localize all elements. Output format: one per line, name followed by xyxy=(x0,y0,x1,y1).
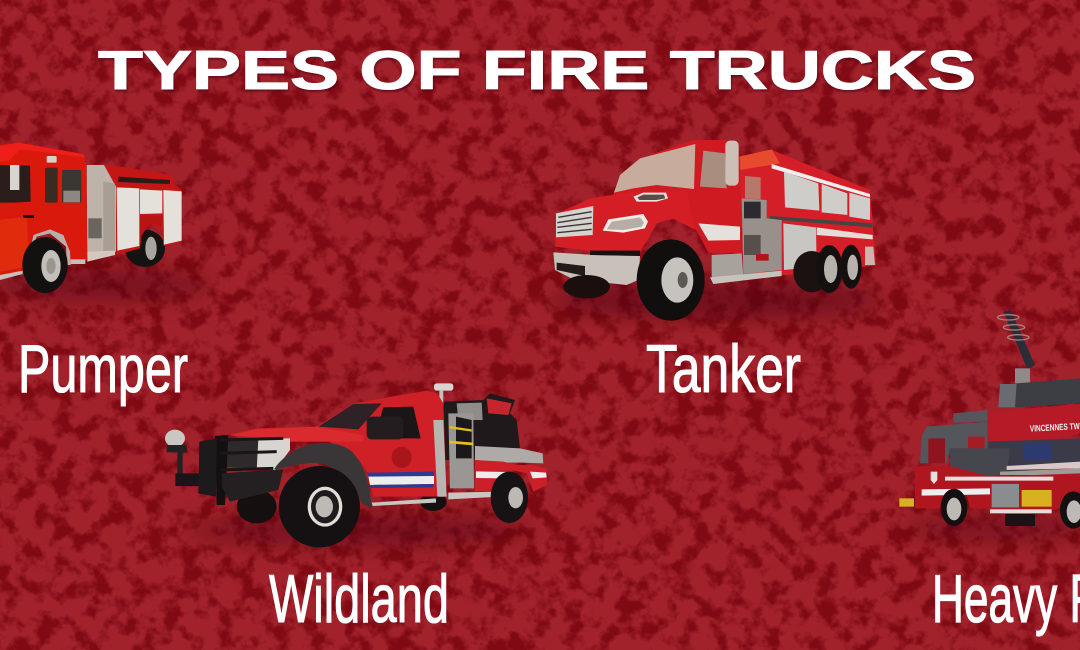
truck: heavy rescue xyxy=(899,310,1080,540)
truck: wildland xyxy=(165,383,547,547)
lower body xyxy=(899,465,1080,526)
front wheel xyxy=(941,489,967,526)
winch camera xyxy=(165,430,202,486)
label: wildland: Wildland xyxy=(269,561,449,637)
truck: tanker xyxy=(545,140,885,321)
label: pumper: Pumper xyxy=(18,331,188,407)
rear wheel outer xyxy=(491,472,528,523)
rear wheel xyxy=(125,230,165,267)
fender xyxy=(274,443,372,508)
second wheel xyxy=(1060,491,1080,529)
grille guard and bumper xyxy=(198,435,290,505)
rear wheels xyxy=(237,490,447,523)
front wheel xyxy=(279,466,360,547)
pump panel xyxy=(710,176,782,284)
equipment bed xyxy=(434,383,547,499)
cab xyxy=(553,140,742,298)
rear body xyxy=(103,165,182,255)
pump panel xyxy=(87,165,116,262)
title: TYPES OF FIRE TRUCKS xyxy=(98,39,976,101)
truck: pumper xyxy=(0,142,215,301)
roof compartments xyxy=(953,378,1080,423)
cab xyxy=(0,142,87,280)
cab upper xyxy=(920,422,988,463)
rear wheels xyxy=(793,245,862,293)
tank body xyxy=(739,149,876,277)
label: tanker: Tanker xyxy=(646,331,801,407)
upper red body xyxy=(988,404,1080,473)
cab and hood xyxy=(230,391,447,506)
front wheel xyxy=(22,237,68,293)
front wheel xyxy=(637,239,705,321)
glass and platforms xyxy=(950,448,1080,477)
mast xyxy=(998,310,1035,383)
